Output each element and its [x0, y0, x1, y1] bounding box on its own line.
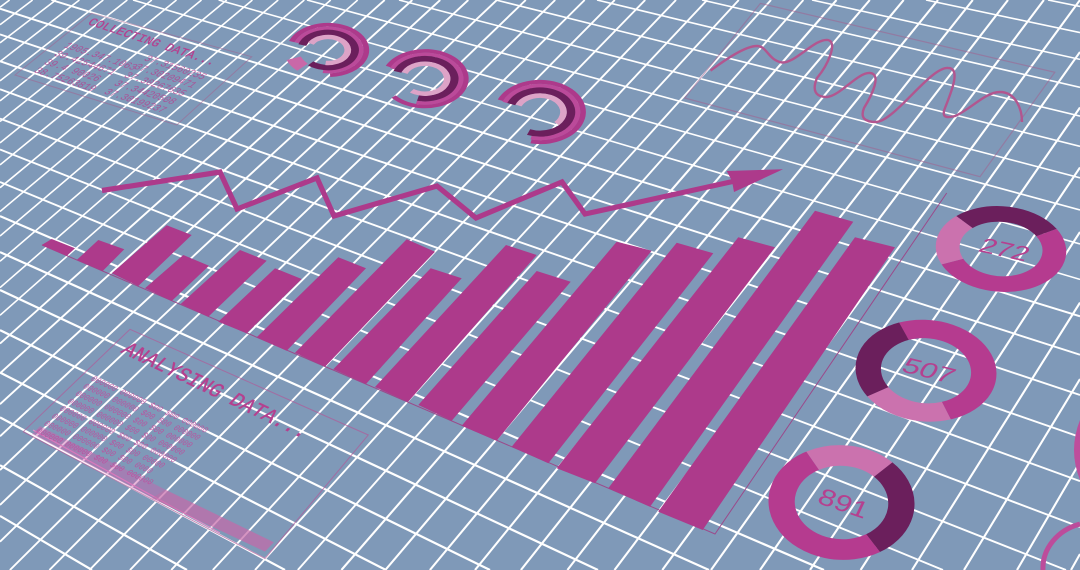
data table left column: 39.4 90026: [40, 58, 104, 84]
data table: 000000 000000 $00 $00 000000: [64, 397, 187, 457]
data table right column: [100, 54, 209, 116]
bars: [42, 211, 895, 530]
bar chart: [42, 193, 947, 534]
partial ring 1: [276, 16, 380, 84]
pink lower rule: [33, 430, 220, 533]
partial circle right edge: [1074, 420, 1080, 480]
heading: collecting data: COLLECTING DATA...: [84, 16, 219, 69]
partial ring 3: [484, 73, 596, 151]
wave line: [710, 40, 1022, 122]
data table right column: 37.34420508: [110, 79, 179, 107]
donut 272: [922, 194, 1080, 304]
data table right column: 37.31560235: [140, 54, 209, 82]
data table: 000000 000000 $00 $00 0000: [41, 419, 155, 476]
donut 891: [754, 432, 929, 570]
data table: 000000 000000 $00 $00 000000: [88, 375, 211, 435]
data table: 000000 000000 $00 $00 000000: [56, 404, 179, 465]
data table: 000000 000000 $00 $00 000000: [72, 390, 195, 450]
dense row band: [32, 426, 165, 498]
trend arrow: [102, 169, 783, 218]
heading: analysing data: ANALYSING DATA...: [115, 340, 314, 444]
data table left column: 1905.347.1063: [60, 41, 140, 73]
partial ring 2: [370, 42, 480, 116]
pink translucent band: [152, 490, 274, 552]
partial circle bottom right: [1043, 524, 1080, 570]
data table left column: [30, 41, 140, 98]
data table: 000000 000000 $00 $00 000000: [80, 382, 203, 443]
data table right column: 37.30199237: [100, 88, 169, 116]
data table: [33, 375, 211, 487]
data table left column: 38.75263819: [30, 66, 99, 94]
value 272: 272: [975, 233, 1035, 266]
panel: analysing data: [23, 329, 368, 558]
data table right column: 37.30209471: [130, 63, 199, 91]
chart axis frame: [42, 193, 947, 534]
panel: wave line chart: [685, 3, 1055, 177]
panel: collecting data: [15, 13, 252, 125]
value 507: 507: [897, 353, 961, 388]
data table right column: 37.30267635: [120, 71, 189, 99]
data table: 000000 000000 $00 $00 000000: [33, 427, 156, 487]
data table: 000000 000000 $00 $00 00000: [48, 412, 167, 470]
data table left column: 39.42544671: [50, 50, 119, 78]
donut 507: [840, 306, 1012, 436]
value 891: 891: [814, 483, 873, 524]
